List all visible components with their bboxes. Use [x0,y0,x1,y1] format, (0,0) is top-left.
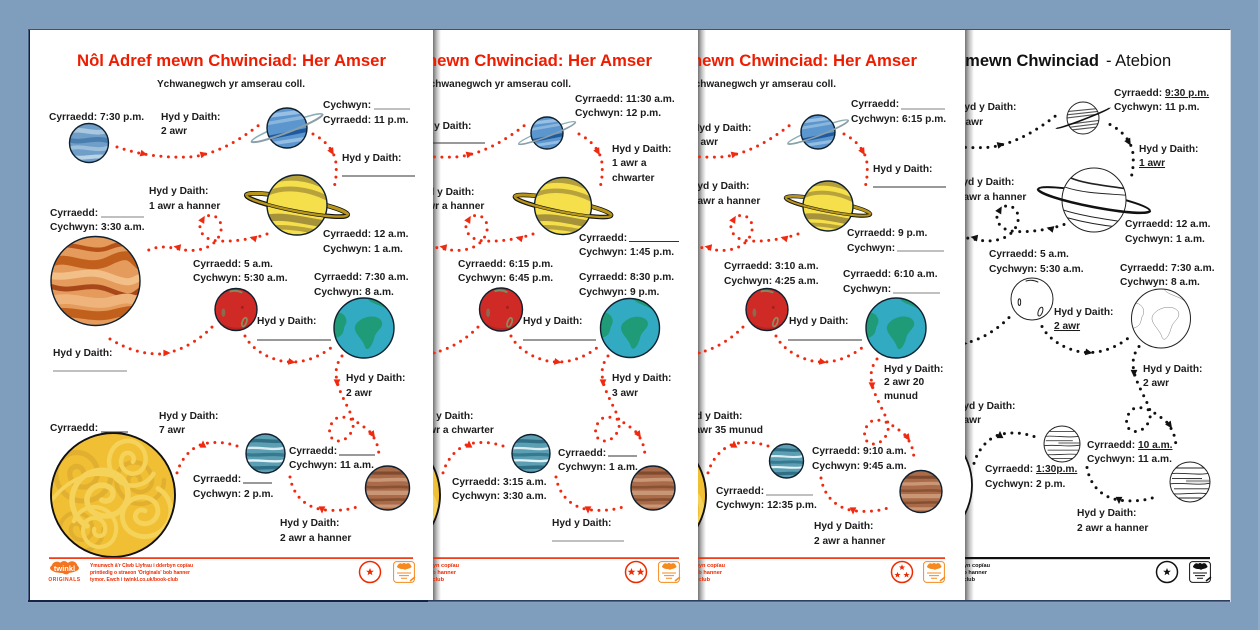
planets [698,114,943,528]
text: times and journeys: 2 awr [1054,321,1080,332]
text: times and journeys: Cychwyn: 1:45 p.m. [579,247,674,258]
text: times and journeys: 1 awr a hanner [689,196,760,207]
text: times and journeys: Cychwyn: 12 p.m. [575,108,661,119]
text: times and journeys: munud [884,391,918,402]
panel: page 2 [433,30,698,600]
routes: dotted paths [965,114,1178,504]
text: times and journeys: Cyrraedd: [558,448,606,459]
text: times and journeys: 1 awr [1139,158,1165,169]
text: times and journeys [955,88,1215,534]
text: times and journeys: Hyd y Daith: [956,401,1015,412]
text: times and journeys: Hyd y Daith: [412,121,471,132]
text: times and journeys: Cychwyn: 1 a.m. [323,244,403,255]
text: times and journeys: 2 awr 20 [884,377,925,388]
text: times and journeys: 1 awr a hanner [413,201,484,212]
text: times and journeys: Cychwyn: 11 a.m. [1087,454,1172,465]
footer: /book-club [682,577,711,583]
text: times and journeys [683,99,946,547]
text: times and journeys: Cyrraedd: 9:10 a.m. [812,446,907,457]
footer: 'Originals' bob hanner [663,570,723,576]
text: times and journeys: Hyd y Daith: [342,153,401,164]
text: times and journeys: Hyd y Daith: [814,521,873,532]
text: times and journeys: 7 awr [159,425,185,436]
text: times and journeys: Hyd y Daith: [1143,364,1202,375]
footer: i dderbyn copïau [945,563,991,569]
text: book club note: Ymunwch â'r Clwb Llyfrau i dderbyn copïau [90,563,194,569]
text: times and journeys: Cyrraedd: [289,446,337,457]
text: times and journeys: Cyrraedd: [193,474,241,485]
text: times and journeys: Cychwyn: 8 a.m. [314,287,394,298]
heading: answers title: Nôl Adref mewn Chwinciad [887,52,1099,70]
text: instruction: Ychwanegwch yr amserau coll. [688,79,836,90]
text: times and journeys: Cychwyn: 6:45 p.m. [458,273,553,284]
logo: twinkl originals: ORIGINALS [48,577,81,583]
text: times and journeys: Hyd y Daith: [957,102,1016,113]
text: times and journeys: Cyrraedd: 7:30 a.m. [314,272,409,283]
footer: i dderbyn copïau [680,563,726,569]
text: times and journeys [412,94,679,541]
text: times and journeys: Hyd y Daith: [683,411,742,422]
text: times and journeys: Cychwyn: 9 p.m. [579,287,660,298]
text: times and journeys: Cyrraedd: 1:30p.m. [985,464,1077,475]
text: times and journeys: Cyrraedd: 11:30 a.m. [575,94,675,105]
text: instruction: Ychwanegwch yr amserau coll. [423,79,571,90]
footer: 'Originals' bob hanner [397,570,457,576]
heading: answers title [966,54,1170,66]
text: times and journeys: Cychwyn: 3:30 a.m. [452,491,547,502]
text: times and journeys: Cychwyn: 8 a.m. [1120,277,1200,288]
text: times and journeys: Cychwyn: 4:25 a.m. [724,276,819,287]
text: book club note [90,563,194,583]
planets [433,116,676,526]
text: times and journeys: Cychwyn: 9:45 a.m. [812,461,907,472]
text: times and journeys: Cychwyn: 2 p.m. [985,479,1066,490]
text: times and journeys: Cyrraedd: [50,423,98,434]
text: book club note: printiedig o straeon 'Originals' bob hanner [90,570,191,576]
text: times and journeys: Hyd y Daith: [1054,307,1113,318]
text: times and journeys: Cyrraedd: 6:15 p.m. [458,259,553,270]
text: times and journeys: Cyrraedd: 10 a.m. [1087,440,1173,451]
text: times and journeys: 2 awr [161,126,187,137]
text: times and journeys: Cyrraedd: 7:30 p.m. [49,112,144,123]
text: times and journeys: Hyd y Daith: [612,373,671,384]
text: times and journeys: Cyrraedd: 6:10 a.m. [843,269,938,280]
footer [663,557,945,583]
logo: twinkl originals [48,561,80,581]
text: times and journeys: Cyrraedd: 9 p.m. [847,228,928,239]
planets: outline [965,102,1210,516]
text: times and journeys: 3 awr [612,388,638,399]
text: times and journeys: Cychwyn: 1 a.m. [558,462,638,473]
text: times and journeys: Cyrraedd: [716,486,764,497]
text: times and journeys: 2 awr [957,117,983,128]
panel: page 1 [30,30,433,600]
logo: twinkl originals: twinkl [54,564,75,573]
text: times and journeys: Hyd y Daith: [257,316,316,327]
text: times and journeys: Hyd y Daith: [1139,144,1198,155]
text: times and journeys: Cyrraedd: 5 a.m. [989,249,1069,260]
text: times and journeys: Hyd y Daith: [955,177,1014,188]
text: times and journeys: Hyd y Daith: [552,518,611,529]
text: times and journeys: Cychwyn: 2 p.m. [193,489,274,500]
text: times and journeys: 1 awr a hanner [955,192,1026,203]
footer: /book-club [947,577,976,583]
text: times and journeys: Hyd y Daith: [53,348,112,359]
text: times and journeys: Hyd y Daith: [149,186,208,197]
panel: page 3 [698,30,965,600]
text: book club note: tymor. Ewch i twinkl.co.uk/book-club [90,577,179,583]
text: times and journeys: Cyrraedd: [851,99,899,110]
text: times and journeys: Cyrraedd: 3:15 a.m. [452,477,547,488]
text: times and journeys: Cychwyn: 12:35 p.m. [716,500,817,511]
text: times and journeys: Hyd y Daith: [414,411,473,422]
heading: title: Nôl Adref mewn Chwinciad: Her Amser [608,52,918,70]
text: times and journeys: Cyrraedd: [50,208,98,219]
text: times and journeys: Hyd y Daith: [612,144,671,155]
text: times and journeys: Hyd y Daith: [789,316,848,327]
text: times and journeys: Cychwyn: [843,284,891,295]
routes: dotted paths [433,124,646,514]
footer [397,557,680,583]
text: times and journeys: Cychwyn: 5:30 a.m. [193,273,288,284]
routes: dotted paths [110,125,379,514]
text: times and journeys: Cychwyn: 3:30 a.m. [50,222,145,233]
text: times and journeys [49,100,415,544]
text: times and journeys: Hyd y Daith: [161,112,220,123]
text: times and journeys: Hyd y Daith: [346,373,405,384]
icon: quality badge [394,562,415,582]
planets [51,108,410,557]
text: times and journeys: 2 awr a hanner [280,533,351,544]
text: times and journeys: Cychwyn: 11 a.m. [289,460,374,471]
text: times and journeys: Hyd y Daith: [873,164,932,175]
text: times and journeys: Cychwyn: 5:30 a.m. [989,264,1084,275]
footer: /book-club [416,577,445,583]
footer: 'Originals' bob hanner [928,570,988,576]
routes: dotted paths [698,124,916,514]
text: times and journeys: Hyd y Daith: [884,364,943,375]
text: times and journeys: 2 awr a hanner [814,536,885,547]
text: times and journeys: Cychwyn: 1 a.m. [1125,234,1205,245]
footer [48,557,415,583]
text: times and journeys: Hyd y Daith: [690,181,749,192]
text: times and journeys: Cychwyn: 11 p.m. [1114,102,1200,113]
text: times and journeys: Cyrraedd: 7:30 a.m. [1120,263,1215,274]
text: times and journeys: Cychwyn: [323,100,371,111]
text: instruction: Ychwanegwch yr amserau coll. [157,79,305,90]
text: times and journeys: 1 awr a hanner [149,201,220,212]
text: times and journeys: Hyd y Daith: [415,187,474,198]
text: times and journeys: Cychwyn: [847,243,895,254]
text: times and journeys: Cyrraedd: 11 p.m. [323,115,409,126]
text: times and journeys: Cyrraedd: 8:30 p.m. [579,272,674,283]
heading: title: Nôl Adref mewn Chwinciad: Her Amser [77,52,387,70]
text: times and journeys: Cychwyn: 6:15 p.m. [851,114,946,125]
text: times and journeys: Hyd y Daith: [1077,508,1136,519]
text: times and journeys: 2 awr [346,388,372,399]
text: times and journeys: Cyrraedd: 5 a.m. [193,259,273,270]
text: times and journeys: Hyd y Daith: [523,316,582,327]
heading: answers title: - Atebion [1106,52,1171,70]
footer [965,557,1212,584]
text: times and journeys: 1 awr a chwarter [414,425,494,436]
text: times and journeys: 7 awr [955,415,981,426]
text: times and journeys: 1 awr a [612,158,647,169]
text: times and journeys: Cyrraedd: [579,233,627,244]
text: times and journeys: 2 awr a hanner [1077,523,1148,534]
text: times and journeys: Cyrraedd: 9:30 p.m. [1114,88,1209,99]
text: times and journeys: chwarter [612,173,655,184]
text: times and journeys: 1 awr 35 munud [686,425,763,436]
panel: page 4 answers [965,30,1230,600]
text: times and journeys: Hyd y Daith: [280,518,339,529]
text: times and journeys: Cyrraedd: 3:10 a.m. [724,261,819,272]
icon: one star [360,562,380,582]
footer: i dderbyn copïau [414,563,460,569]
text: times and journeys: Cyrraedd: 12 a.m. [323,229,409,240]
text: times and journeys: Hyd y Daith: [159,411,218,422]
text: times and journeys: 5 awr [692,137,718,148]
text: times and journeys: 2 awr [1143,378,1169,389]
text: times and journeys: Cyrraedd: 12 a.m. [1125,219,1211,230]
text: times and journeys: Hyd y Daith: [692,123,751,134]
heading: title: Nôl Adref mewn Chwinciad: Her Amser [343,52,653,70]
